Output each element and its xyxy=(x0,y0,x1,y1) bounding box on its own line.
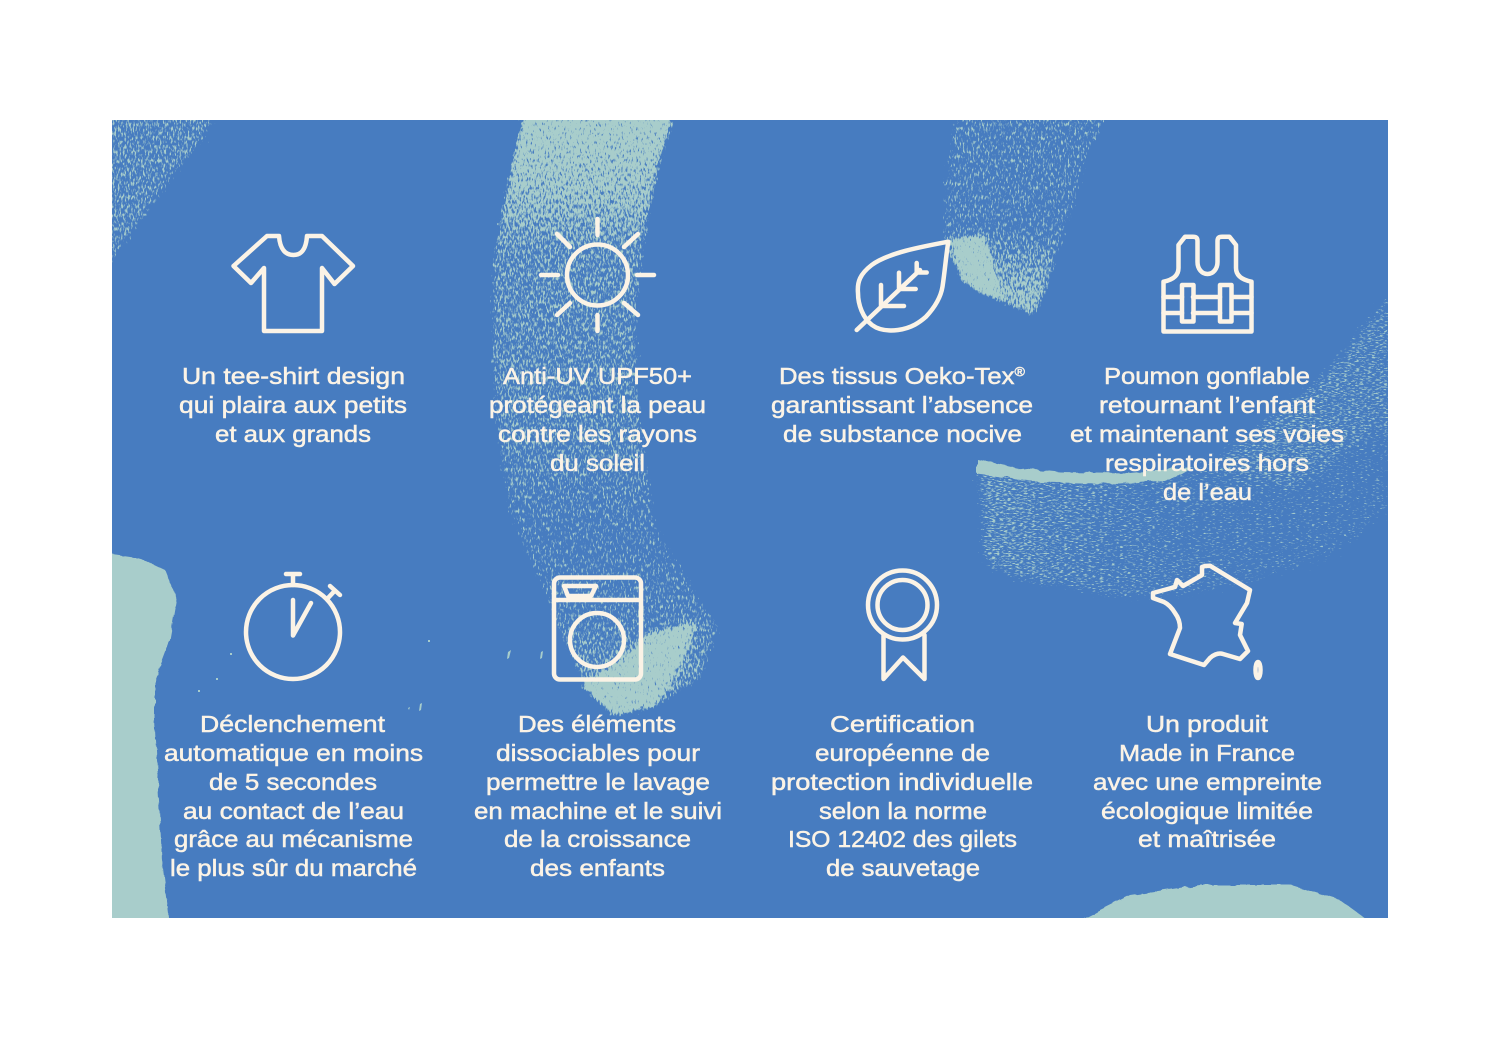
text: Oeko-Tex: Des tissus Oeko-Tex xyxy=(779,363,994,389)
icon: life vest xyxy=(1164,237,1252,332)
text: trigger: le plus sûr du marché xyxy=(170,855,417,881)
text: made in France: écologique limitée xyxy=(1101,798,1313,824)
text: tee-shirt: et aux grands xyxy=(215,421,371,447)
item: certification xyxy=(771,570,1033,881)
text: washable: des enfants xyxy=(530,855,665,881)
text: certification: de sauvetage xyxy=(826,855,980,881)
text: washable: dissociables pour xyxy=(496,740,700,766)
text: washable: en machine et le suivi xyxy=(474,798,722,824)
text: washable xyxy=(474,711,722,881)
text: made in France: Un produit xyxy=(1146,711,1269,737)
text: certification: Certification xyxy=(830,711,975,737)
text: trigger: automatique en moins xyxy=(164,740,423,766)
text: anti-UV: contre les rayons xyxy=(498,421,697,447)
item: tee-shirt xyxy=(179,236,407,447)
text: certification: protection individuelle xyxy=(771,769,1033,795)
text: certification: européenne de xyxy=(815,740,990,766)
brush stroke: bottom left strip xyxy=(112,554,176,918)
text: trigger: au contact de l’eau xyxy=(183,798,404,824)
text: washable: Des éléments xyxy=(518,711,676,737)
icon: sun xyxy=(541,219,654,331)
text: tee-shirt xyxy=(179,363,407,447)
text: trigger: grâce au mécanisme xyxy=(174,826,413,852)
text: Oeko-Tex: garantissant l’absence xyxy=(771,392,1033,418)
brush strokes: right swoosh xyxy=(975,280,1396,602)
text: made in France: Made in France xyxy=(1119,740,1295,766)
item: trigger xyxy=(164,574,423,881)
text: tee-shirt: qui plaira aux petits xyxy=(179,392,407,418)
text: inflatable vest xyxy=(1070,363,1344,505)
text: anti-UV xyxy=(489,363,706,476)
icon: leaf xyxy=(857,242,948,330)
item: anti-UV xyxy=(489,219,706,476)
text: anti-UV: Anti-UV UPF50+ xyxy=(503,363,692,389)
paint specks xyxy=(198,640,543,711)
icon: stopwatch xyxy=(246,574,340,679)
text: anti-UV: protégeant la peau xyxy=(489,392,706,418)
brush strokes background xyxy=(105,112,1396,926)
text: trigger: Déclenchement xyxy=(200,711,386,737)
text: inflatable vest: Poumon gonflable xyxy=(1104,363,1310,389)
brush stroke: bottom right arc xyxy=(1084,884,1364,918)
text: Oeko-Tex: de substance nocive xyxy=(783,421,1022,447)
text: made in France: avec une empreinte xyxy=(1093,769,1322,795)
text: inflatable vest: respiratoires hors xyxy=(1105,450,1309,476)
text: inflatable vest: de l’eau xyxy=(1163,479,1252,505)
brush stroke: swoosh solid top edge xyxy=(977,459,1193,484)
item: inflatable vest xyxy=(1070,237,1344,505)
text: inflatable vest: et maintenant ses voies xyxy=(1070,421,1344,447)
panel: blue card background xyxy=(112,120,1388,918)
item: Oeko-Tex xyxy=(771,242,1033,447)
icon: France map xyxy=(1153,566,1260,678)
text: certification xyxy=(771,711,1033,881)
text: certification: selon la norme xyxy=(819,798,987,824)
text: Oeko-Tex xyxy=(771,363,1033,447)
icon: medal xyxy=(868,570,937,679)
text: certification: ISO 12402 des gilets xyxy=(788,826,1017,852)
text: made in France xyxy=(1093,711,1322,852)
text: Oeko-Tex: ® xyxy=(1015,364,1025,379)
text: made in France: et maîtrisée xyxy=(1138,826,1276,852)
brush strokes: top left, central band and top right band xyxy=(105,112,1113,717)
text: washable: de la croissance xyxy=(504,826,691,852)
text: inflatable vest: retournant l’enfant xyxy=(1099,392,1316,418)
text: trigger: de 5 secondes xyxy=(209,769,377,795)
item: washable xyxy=(474,578,722,881)
text: tee-shirt: Un tee-shirt design xyxy=(182,363,405,389)
item: made in France xyxy=(1093,566,1322,852)
text: trigger xyxy=(164,711,423,881)
icon: washing machine xyxy=(554,578,641,680)
text: anti-UV: du soleil xyxy=(550,450,645,476)
text: washable: permettre le lavage xyxy=(486,769,710,795)
icon: tee-shirt xyxy=(234,236,353,331)
